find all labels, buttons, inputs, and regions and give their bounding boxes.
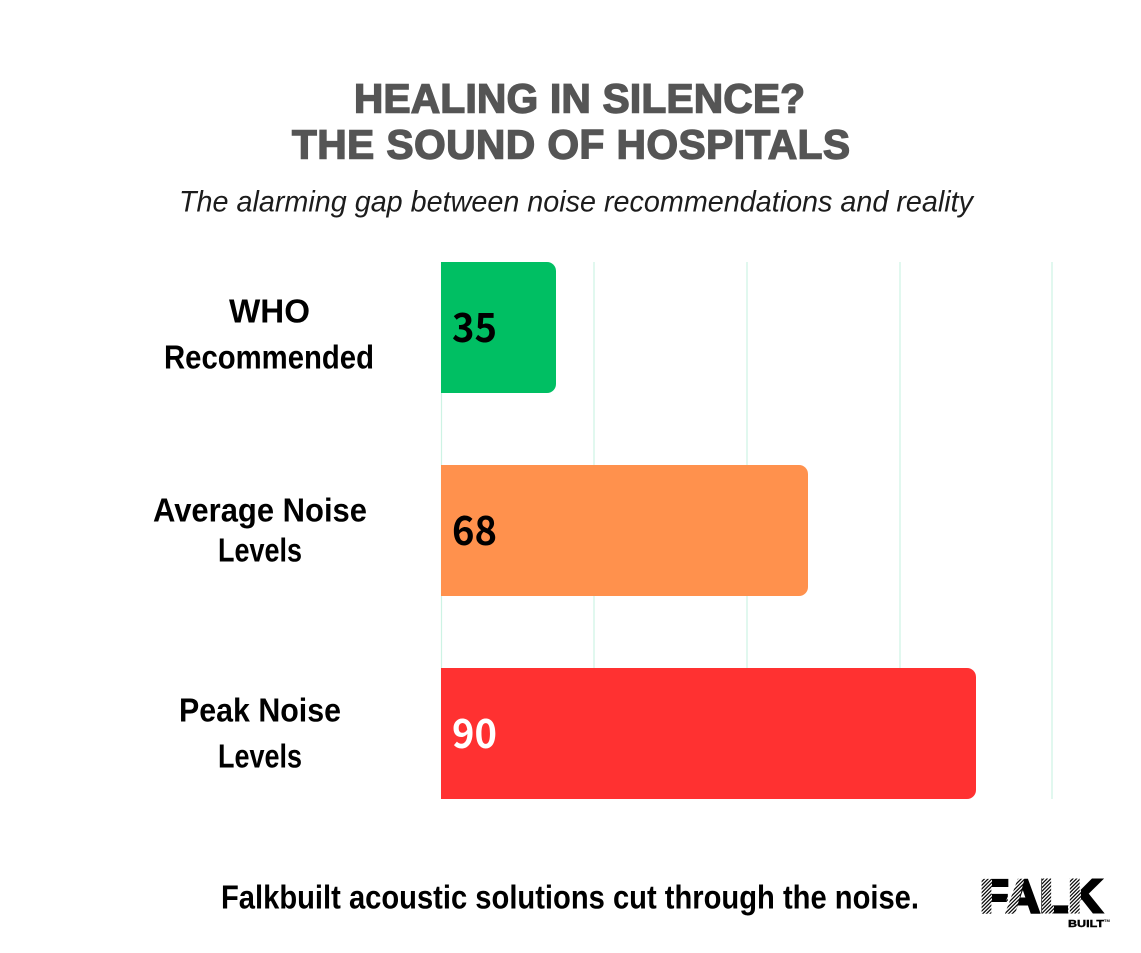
bar: WHO Recommended 35 bbox=[441, 262, 556, 393]
bar: Average Noise Levels 68: 68 bbox=[452, 499, 497, 557]
category labels bbox=[153, 292, 374, 774]
label: Average Noise Levels bbox=[153, 492, 367, 568]
title: THE SOUND OF HOSPITALS bbox=[292, 122, 850, 168]
logo: Falkbuilt: BUILT bbox=[1068, 918, 1105, 930]
title bbox=[292, 76, 850, 168]
label: Peak Noise Levels: Peak Noise bbox=[179, 692, 341, 728]
logo: Falkbuilt: TM bbox=[1104, 918, 1110, 923]
bar: Peak Noise Levels 90 bbox=[441, 668, 976, 799]
label: WHO Recommended: Recommended bbox=[164, 338, 374, 376]
label: Peak Noise Levels bbox=[179, 692, 341, 774]
label: Average Noise Levels: Levels bbox=[218, 532, 302, 568]
footer tagline: Falkbuilt acoustic solutions cut through the noise. bbox=[221, 878, 919, 916]
label: WHO Recommended bbox=[164, 292, 374, 376]
label: WHO Recommended: WHO bbox=[229, 292, 310, 330]
label: Average Noise Levels: Average Noise bbox=[153, 492, 367, 528]
title: HEALING IN SILENCE? bbox=[354, 76, 805, 122]
bar: Peak Noise Levels 90: 90 bbox=[452, 702, 497, 760]
subtitle: The alarming gap between noise recommendations and reality bbox=[179, 186, 975, 218]
label: Peak Noise Levels: Levels bbox=[218, 738, 302, 774]
bar: Average Noise Levels 68 bbox=[441, 465, 808, 596]
bar: WHO Recommended 35: 35 bbox=[452, 296, 497, 354]
logo: Falkbuilt: FALK bbox=[980, 870, 1102, 922]
